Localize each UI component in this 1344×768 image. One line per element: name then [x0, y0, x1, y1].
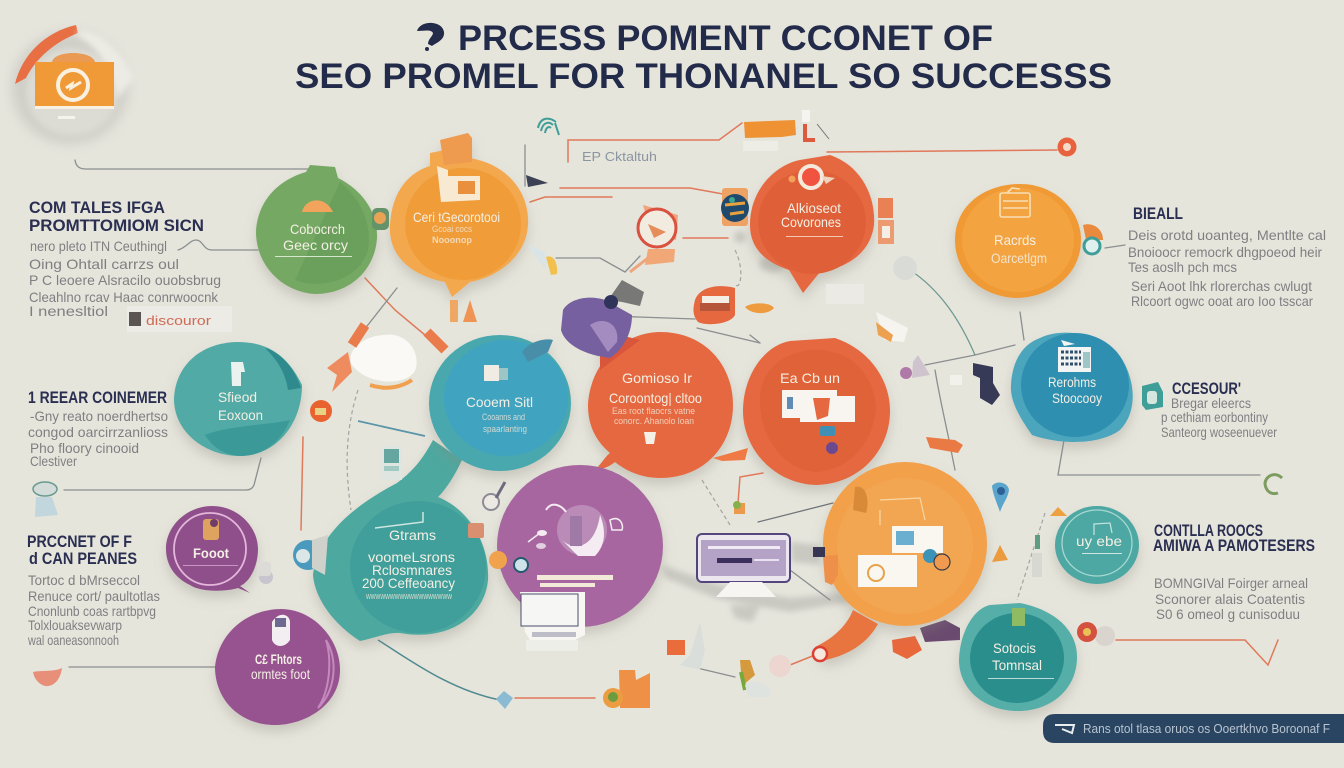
teal bottom text [988, 640, 1054, 679]
icon: chart frame [1094, 523, 1112, 535]
heading [29, 199, 204, 235]
panel: teal left bubble [174, 342, 302, 456]
right blue text [1048, 374, 1102, 406]
icon: teal mini panel [381, 446, 402, 480]
icon: teal bubble chart line [375, 512, 423, 528]
right cluster blobs [876, 256, 1000, 453]
teal bubble text: voomeLsrons [368, 549, 455, 565]
teal bubble text: Rclosmnares [372, 562, 452, 578]
panel: red bubble mid [588, 330, 733, 478]
panel: right blue bubble [1011, 333, 1133, 442]
text block: contlla roocs: Sconorer alais Coatentis [1155, 591, 1305, 607]
panel: purple bottom bubble [215, 609, 340, 725]
red mid text: Gomioso Ir [622, 370, 692, 386]
teal left text [218, 389, 263, 423]
icon: teal badge [1142, 382, 1163, 410]
heading: COM TALES IFGA [29, 199, 165, 217]
red mid text: Eas root flaocrs vatne [612, 406, 695, 416]
text block: procnet: Tortoc d bMrseccol [28, 572, 140, 588]
icon: building [1058, 340, 1091, 372]
text block: bieall: Bnoioocr remocrk dhgpoeod heir [1128, 244, 1322, 260]
title: PRCESS POMENT CCONET OF [458, 19, 993, 58]
icon: flag pointer [526, 175, 548, 187]
blue bubble text [466, 394, 533, 434]
orange bubble text: Nooonop [432, 235, 472, 245]
purple bottom text [251, 651, 310, 682]
icon: blue gear [293, 535, 328, 575]
panel: green bubble [256, 165, 377, 294]
right orange text [991, 232, 1047, 266]
green bubble text: Geec orcy [283, 237, 348, 253]
icon: red orb [310, 400, 332, 422]
right blue text: Rerohms [1048, 374, 1096, 390]
icon: green side tag [372, 208, 389, 230]
heading: PROMTTOMIOM SICN [29, 217, 204, 235]
wing: orange between [713, 448, 748, 461]
text block: ccesour [1161, 380, 1277, 440]
text block: bieall: BIEALL [1133, 205, 1183, 223]
icon: pink heart marker [33, 668, 62, 686]
right orange text: Oarcetlgm [991, 250, 1047, 266]
small teal text: uy ebe [1076, 533, 1122, 549]
panel: small teal right bubble [1055, 506, 1139, 584]
icon: teal house [468, 523, 484, 538]
orange bubble text: Gcoai cocs [432, 224, 472, 234]
icon: orange box bottom [603, 622, 705, 708]
teal left text: Sfieod [218, 389, 257, 405]
panel: orange big bubble [815, 462, 987, 660]
text block: rear coinemer: -Gny reato noerdhertso [30, 408, 168, 424]
text block: promotion sign: I nenesltiol [29, 303, 108, 319]
text block: contlla roocs: CONTLLA ROOCS [1154, 522, 1263, 540]
green bubble text [275, 221, 352, 257]
panel: red bubble 2 [743, 338, 890, 485]
icon: orange tag [302, 200, 333, 212]
teal bottom text: Tomnsal [992, 657, 1042, 673]
text block: rear coinemer: Clestiver [30, 453, 77, 469]
red mid text: conorc. Ahanolo loan [614, 416, 694, 426]
text block: procnet: Renuce cort/ paultotlas [28, 588, 160, 604]
text block: promotion sign: Oing Ohtall carrzs oul [29, 256, 179, 272]
soft shadow bands [662, 231, 850, 622]
text block: procnet: wal oaneasonnooh [27, 632, 119, 648]
icon: blue diamond [496, 691, 513, 709]
text block: procnet: Tolxlouaksevwarp [28, 617, 122, 633]
panel: teal bottom bubble [959, 603, 1077, 711]
icon: purple backpack [561, 280, 644, 358]
footer bar [1043, 714, 1344, 743]
right blue text: Stoocooy [1052, 390, 1102, 406]
icon: red target [788, 166, 835, 188]
panel: blue bubble mid [429, 335, 571, 471]
icon: colourful globe [721, 188, 749, 226]
icon: monitor [697, 534, 790, 597]
text block: procnet: Cnonlunb coas rartbpvg [28, 603, 156, 619]
icon: top right red badge [1058, 138, 1076, 156]
icon: tag [203, 519, 219, 540]
icon: white cup [272, 615, 290, 646]
text block: rear coinemer [28, 389, 168, 469]
connectors [64, 123, 1278, 700]
green bubble text: Cobocrch [290, 221, 345, 237]
title [295, 19, 1112, 96]
text block: procnet: d CAN PEANES [29, 550, 137, 568]
text block: promotion sign [29, 199, 221, 319]
icon: wifi arcs [538, 119, 559, 135]
icon: folder monitor with swirl [12, 25, 134, 144]
teal bubble text: Gtrams [389, 527, 436, 543]
panel: teal big speech bubble [313, 440, 488, 641]
icon: laptop [520, 592, 585, 651]
text block: bieall: Deis orotd uoanteg, Mentlte cal [1128, 227, 1326, 243]
text block: bieall: Tes aoslh pch mcs [1128, 259, 1237, 275]
icon: white cloud [327, 325, 445, 392]
icon: red side tabs [878, 198, 894, 244]
icon: question mark [417, 23, 444, 51]
orange bubble text: Ceri tGecorotooi [413, 209, 500, 225]
icon: green tag [1012, 608, 1025, 626]
icon: footer arrow [1055, 725, 1074, 733]
footer bar: Rans otol tlasa oruos os Ooertkhvo Boroonaf F [1083, 722, 1330, 736]
button: discouror [127, 306, 232, 332]
text block: rear coinemer: 1 REEAR COINEMER [28, 389, 167, 407]
red bubble text [781, 200, 843, 237]
panel: right orange bubble [955, 184, 1081, 298]
icon: yellow marker [527, 245, 557, 275]
panel: purple small bubble [166, 506, 258, 593]
icon: red ring [813, 647, 827, 661]
blue bubble text: Cooem Sitl [466, 394, 533, 410]
teal bubble text: 200 Ceffeoancy [362, 575, 455, 591]
text block: contlla roocs: AMIWA A PAMOTESERS [1153, 537, 1315, 555]
icon: orange bag [489, 551, 528, 572]
icon: green c [1265, 475, 1282, 494]
text block: contlla roocs: S0 6 omeol g cunisoduu [1156, 606, 1300, 622]
icon: orange small tabs [813, 547, 838, 585]
blue bubble text: spaarlanting [483, 424, 527, 434]
icon: white panels [858, 498, 950, 587]
red mid text [609, 370, 702, 426]
text block: procnet [27, 533, 160, 648]
red mid text: Coroontog| cltoo [609, 390, 702, 406]
purple bottom text: ormtes foot [251, 666, 310, 682]
text block: bieall: Rlcoort ogwc ooat aro Ioo tsscar [1131, 293, 1313, 309]
icon: small clip [257, 562, 273, 584]
text block: bieall [1128, 205, 1326, 309]
icon: white pillar [231, 362, 245, 386]
icon: clock [483, 482, 505, 510]
text block: contlla roocs: BOMNGIVal Foirger arneal [1154, 575, 1308, 591]
icon: small orange tabs [992, 507, 1067, 577]
teal bubble text: wwwwwwwwwwwwwwwwww [365, 591, 452, 601]
red bubble text: Covorones [781, 214, 841, 230]
red bubble text: Alkioseot [787, 200, 841, 216]
icon: green orange marker [740, 655, 791, 697]
text block: promotion sign: nero pleto ITN Ceuthingl [30, 238, 167, 254]
icon: document [437, 133, 480, 202]
text block: ccesour: Santeorg woseenuever [1161, 424, 1277, 440]
text block: contlla roocs [1153, 522, 1315, 622]
text block: ccesour: p cethiam eorbontiny [1161, 409, 1268, 425]
blue bubble text: Cooanns and [482, 412, 525, 422]
orange bubble text [413, 209, 500, 245]
purple small text: Fooot [193, 545, 229, 561]
text block: rear coinemer: congod oarcirrzanlioss [28, 424, 168, 440]
small label: top line box: EP Cktaltuh [582, 149, 657, 164]
icon: paper [484, 365, 508, 381]
tag: top orange bar [743, 110, 829, 151]
teal bottom text: Sotocis [993, 640, 1036, 656]
purple bottom text: C£ Fhtors [255, 651, 302, 667]
icon: clipboard [1000, 188, 1030, 217]
icon: teal badge left marker [33, 482, 58, 517]
panel: red bubble top [750, 155, 874, 293]
teal left text: Eoxoon [218, 407, 263, 423]
text block: procnet: PRCCNET OF F [27, 533, 132, 551]
icon: orange triangles [450, 300, 477, 322]
text block: ccesour: CCESOUR' [1172, 380, 1241, 398]
icon: orange speech chip [693, 284, 864, 324]
icon: connector chips behind orange [892, 620, 960, 659]
icon: purple centre chart [528, 505, 622, 587]
icon: small white cup [644, 432, 656, 444]
icon: circle badge [630, 205, 678, 272]
text block: ccesour: Bregar eleercs [1171, 395, 1251, 411]
text block: bieall: Seri Aoot lhk rlorerchas cwlugt [1131, 278, 1312, 294]
icon: small green orange pin [733, 501, 745, 514]
icon: pin blue [992, 483, 1009, 512]
text block: rear coinemer: Pho floory cinooid [30, 440, 139, 456]
button: discouror: discouror [146, 314, 211, 328]
text block: promotion sign: Cleahlno rcav Haac conrwoocnk [29, 289, 219, 305]
title: SEO PROMEL FOR THONANEL SO SUCCESSS [295, 57, 1112, 96]
icon: connector chips right [1077, 622, 1115, 646]
icon: white panel [782, 390, 855, 454]
icon: right orange side badge [1083, 224, 1103, 254]
panel: purple big bubble [497, 465, 663, 627]
text block: promotion sign: P C leoere Alsracilo ouobsbrug [29, 272, 221, 288]
panel: orange bubble top [390, 133, 528, 297]
right orange text: Racrds [994, 232, 1036, 248]
teal bubble text [362, 527, 455, 601]
red bubble 2 text: Ea Cb un [780, 370, 840, 386]
